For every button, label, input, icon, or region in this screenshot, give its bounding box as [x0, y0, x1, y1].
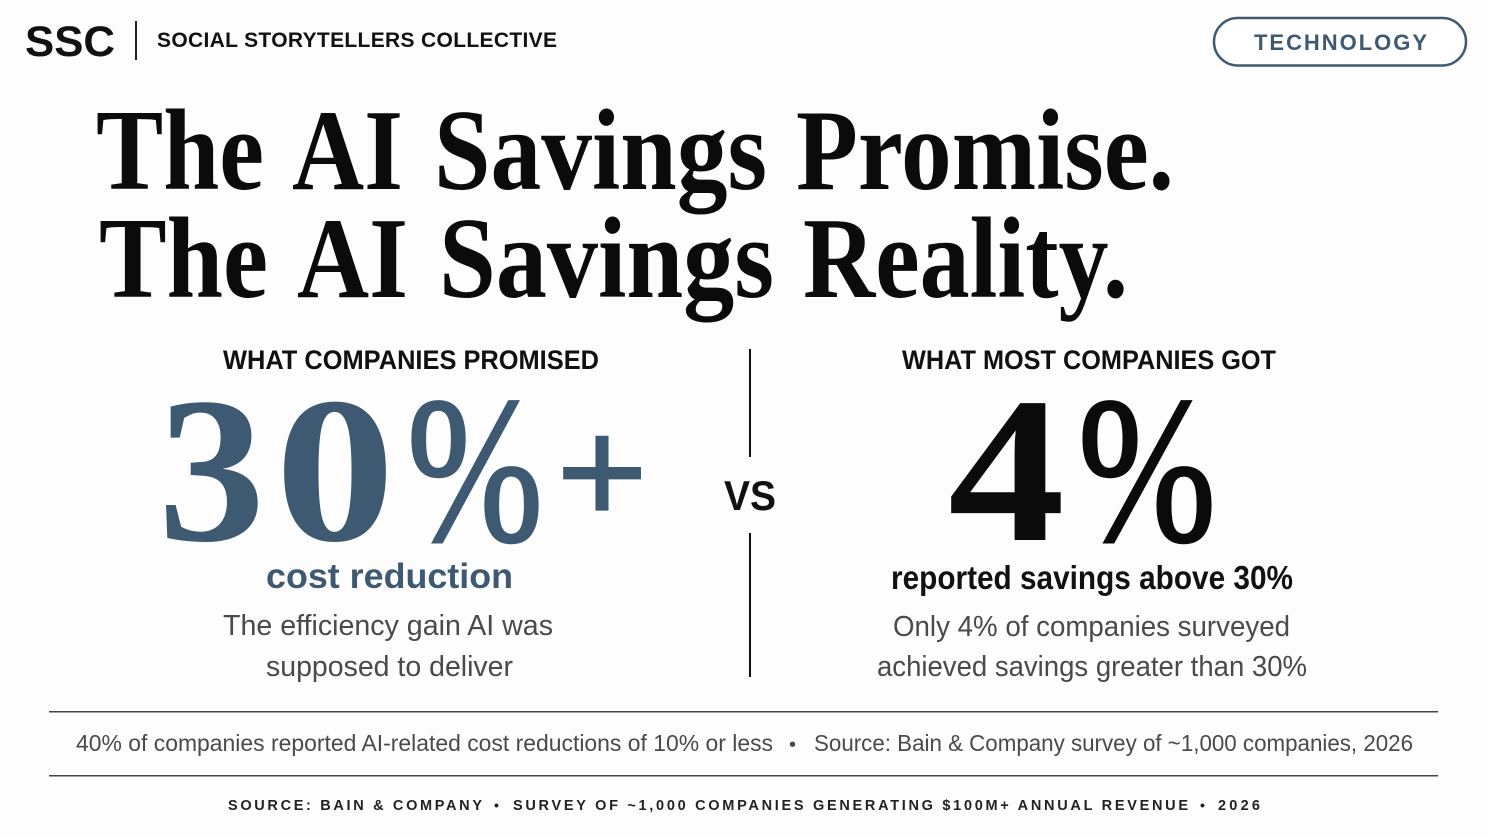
promised label: cost reduction	[266, 557, 513, 596]
result figure: %	[1078, 355, 1216, 585]
promised figure	[158, 355, 543, 585]
promised figure: %	[407, 355, 543, 585]
title: AI	[297, 195, 408, 323]
panel: actual result	[877, 345, 1307, 683]
source line	[228, 797, 1260, 814]
result label: reported savings above 30%	[891, 559, 1293, 596]
result figure: 4	[948, 355, 1065, 585]
panel: actual result: achieved savings greater than 30%	[877, 651, 1307, 683]
result description: Only 4% of companies surveyed	[893, 611, 1290, 643]
footnote band: Source: Bain & Company survey of ~1,000 companies, 2026	[814, 730, 1413, 756]
promised heading: WHAT COMPANIES PROMISED	[223, 345, 599, 375]
footnote band: 40% of companies reported AI-related cost reductions of 10% or less	[76, 730, 773, 756]
panel: promised: supposed to deliver	[266, 651, 513, 683]
title: Savings	[439, 195, 774, 323]
source line: •	[494, 797, 499, 813]
title: Promise.	[796, 87, 1174, 215]
title: The	[99, 195, 268, 323]
title: AI	[292, 87, 403, 215]
header brand	[25, 18, 557, 66]
logo divider	[135, 21, 137, 60]
panel: promised	[158, 345, 646, 683]
source line: 2026	[1218, 798, 1260, 814]
promised description: The efficiency gain AI was	[223, 610, 553, 642]
organisation name: SOCIAL STORYTELLERS COLLECTIVE	[157, 29, 557, 52]
footnote band: •	[789, 734, 796, 756]
category badge	[1214, 18, 1466, 66]
source line: SURVEY OF ~1,000 COMPANIES GENERATING $100M+ ANNUAL REVENUE	[513, 798, 1188, 814]
category badge: TECHNOLOGY	[1254, 30, 1427, 55]
promised figure: 3	[158, 355, 265, 585]
logo: SSC: SSC	[25, 18, 115, 66]
promised plus sign: +	[558, 390, 646, 556]
title: The	[96, 87, 264, 215]
source line: •	[1200, 797, 1205, 813]
title: Savings	[434, 87, 767, 215]
result heading: WHAT MOST COMPANIES GOT	[902, 345, 1276, 375]
versus divider: VS	[724, 472, 776, 519]
promised figure: 0	[275, 355, 395, 585]
title	[96, 87, 1174, 323]
title: Reality.	[803, 195, 1128, 323]
result figure	[948, 355, 1216, 585]
source line: SOURCE: BAIN & COMPANY	[228, 798, 482, 814]
footnote band	[49, 711, 1438, 776]
